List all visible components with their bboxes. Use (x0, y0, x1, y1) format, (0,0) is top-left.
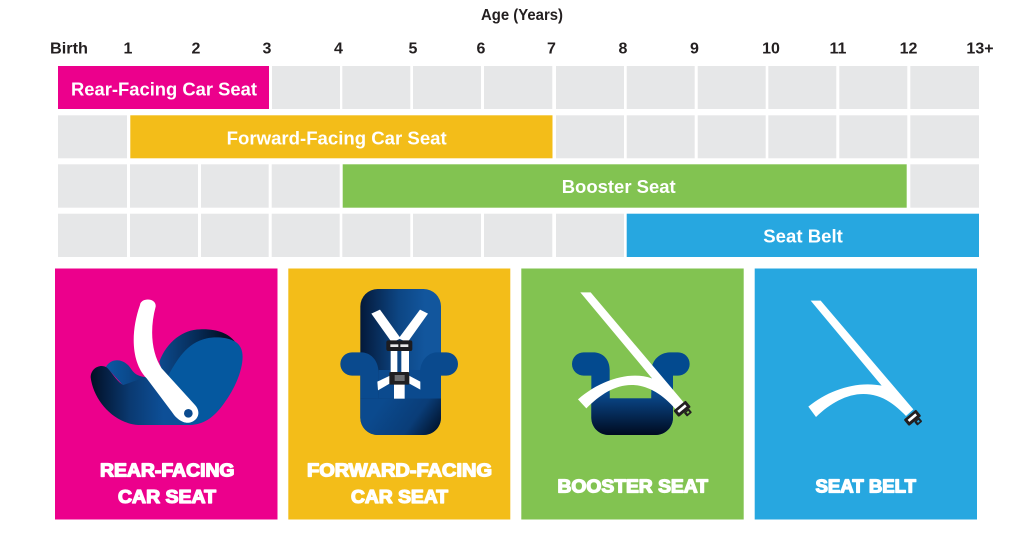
age axis labels: 5 (409, 40, 418, 58)
label: rear-facing car seat: CAR SEAT (118, 487, 216, 507)
age axis labels: 6 (477, 40, 486, 58)
row: rear-facing car seat (58, 66, 979, 109)
icon: forward-facing harness seat (340, 289, 458, 435)
icon: rear-facing infant seat (91, 299, 243, 425)
age axis labels: 8 (619, 40, 628, 58)
age axis labels: 11 (830, 40, 847, 58)
icon: seat belt (808, 301, 924, 430)
age axis labels: 7 (547, 40, 556, 58)
icon: belt buckle (673, 400, 694, 421)
row: seat belt (58, 214, 979, 257)
panel: rear-facing car seat (55, 268, 278, 520)
label: booster seat: BOOSTER SEAT (558, 476, 708, 496)
chart: age timeline (58, 66, 979, 257)
row: forward-facing car seat (58, 115, 979, 158)
age axis labels: Birth (50, 40, 88, 58)
panel: booster seat (521, 268, 744, 520)
heading: age axis title: Age (Years) (481, 7, 563, 24)
row: booster seat (58, 164, 979, 208)
age axis labels (50, 40, 994, 58)
row: rear-facing car seat: Rear-Facing Car Seat (71, 78, 257, 100)
age axis labels: 10 (762, 40, 780, 58)
panel: forward-facing car seat (288, 268, 510, 520)
age axis labels: 2 (192, 40, 201, 58)
row: booster seat: Booster Seat (562, 176, 676, 197)
icon: booster seat with belt (572, 292, 694, 435)
label: rear-facing car seat (100, 460, 234, 507)
age axis labels: 1 (124, 40, 133, 58)
row: forward-facing car seat: Forward-Facing Car Seat (227, 128, 447, 148)
icon: belt buckle (904, 409, 924, 430)
age axis labels: 3 (263, 40, 272, 58)
label: rear-facing car seat: REAR-FACING (100, 460, 234, 480)
row: seat belt: Seat Belt (763, 225, 843, 246)
age axis labels: 9 (690, 40, 699, 58)
label: forward-facing car seat: CAR SEAT (351, 487, 448, 507)
panel: seat belt (755, 268, 977, 520)
label: forward-facing car seat: FORWARD-FACING (307, 460, 492, 480)
label: seat belt: SEAT BELT (816, 476, 916, 496)
label: forward-facing car seat (307, 460, 492, 507)
age axis labels: 4 (334, 40, 343, 58)
age axis labels: 13+ (966, 40, 994, 58)
age axis labels: 12 (900, 40, 918, 58)
